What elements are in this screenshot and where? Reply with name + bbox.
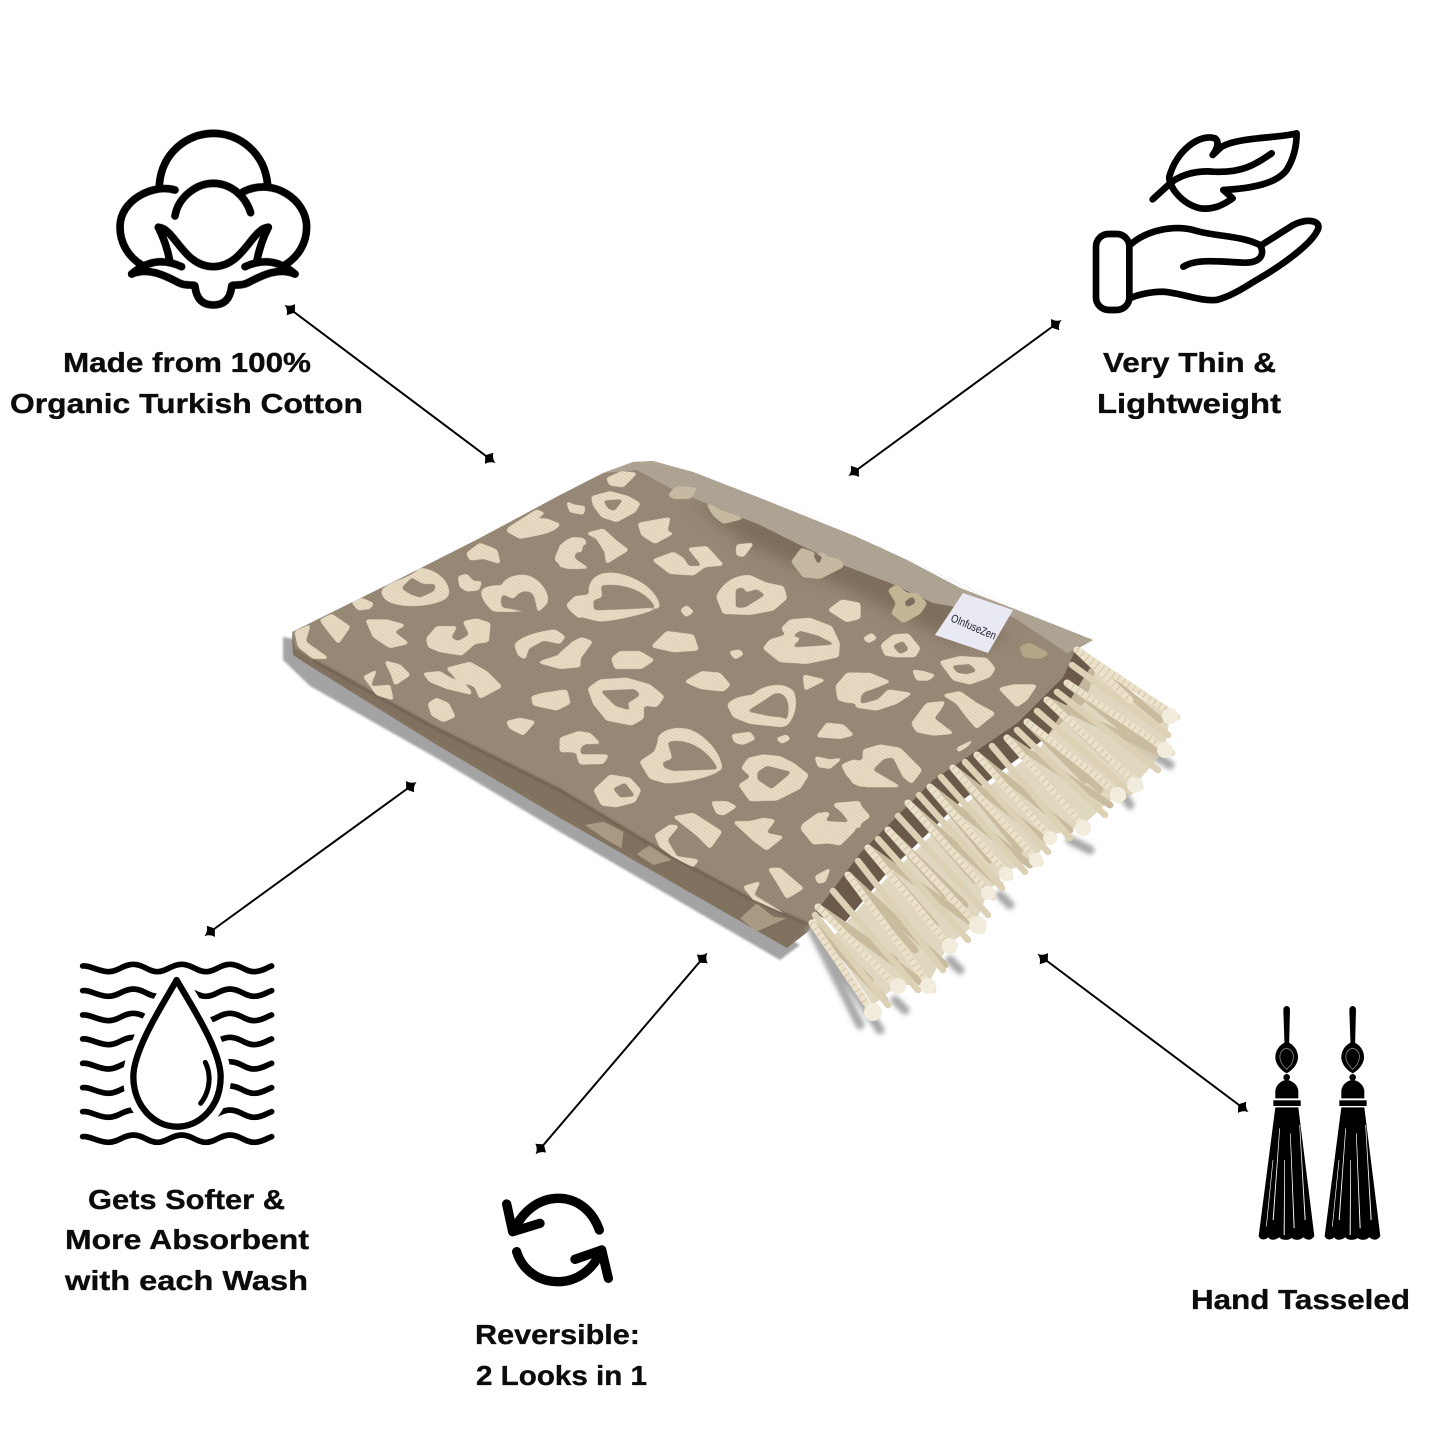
towel lower layer (292, 635, 815, 948)
fringe front strands (812, 650, 1177, 1013)
fringe tufts (864, 708, 1178, 1021)
spots: muted near border (668, 487, 843, 578)
icon: reversible arrows (507, 1198, 608, 1282)
spots: right section (802, 585, 1048, 845)
towel top layer (292, 461, 1093, 925)
right tassel (1325, 1006, 1380, 1240)
arrow: tassels to towel (1033, 948, 1253, 1118)
text: lightweight: Very Thin & (1103, 347, 1276, 378)
fringe shadow (812, 740, 1170, 1030)
arrow: absorbent to towel (200, 776, 421, 942)
text: absorbent: More Absorbent (65, 1224, 309, 1255)
text: hand tasseled: Hand Tasseled (1191, 1284, 1410, 1315)
brand label (935, 593, 1013, 653)
spots: bottom section (560, 729, 860, 915)
text: absorbent (64, 1184, 309, 1296)
fringe backing (815, 650, 1095, 928)
text: cotton: Made from 100% (63, 347, 311, 378)
text: lightweight: Lightweight (1097, 388, 1281, 419)
fringe base fill (830, 668, 1170, 1005)
towel end border band (603, 461, 1093, 653)
fringe twist detail (812, 650, 1177, 1013)
spots: top section (560, 472, 860, 744)
text: absorbent: with each Wash (64, 1265, 308, 1296)
spots: left section (295, 510, 582, 753)
fringe middle strands (815, 665, 1168, 1005)
arrow: reversible to towel (530, 948, 713, 1159)
left tassel (1259, 1006, 1314, 1240)
text: cotton (10, 347, 363, 419)
text: cotton: Organic Turkish Cotton (10, 388, 363, 419)
product: folded leopard towel (283, 461, 1178, 1030)
icon: feather in hand (1096, 133, 1318, 310)
fold shading (313, 660, 810, 925)
text: reversible (475, 1319, 647, 1391)
icon: water drop and waves (83, 964, 272, 1142)
arrow: lightweight to towel (844, 314, 1066, 482)
lower layer spots (585, 822, 787, 932)
text: lightweight (1097, 347, 1281, 419)
text: absorbent: Gets Softer & (88, 1184, 285, 1215)
text: reversible: Reversible: (475, 1319, 640, 1350)
text: reversible: 2 Looks in 1 (476, 1360, 647, 1391)
towel shadow (283, 637, 800, 960)
shaded area below border (690, 500, 1010, 640)
icon: cotton boll (120, 133, 307, 305)
fringe back strands (812, 650, 1165, 1000)
leopard print spots (295, 472, 1048, 915)
weave texture (292, 462, 1093, 948)
brand label: OInfuseZen (949, 613, 998, 643)
icon: tassels (1259, 1006, 1380, 1240)
arrow: cotton to towel (280, 299, 500, 469)
